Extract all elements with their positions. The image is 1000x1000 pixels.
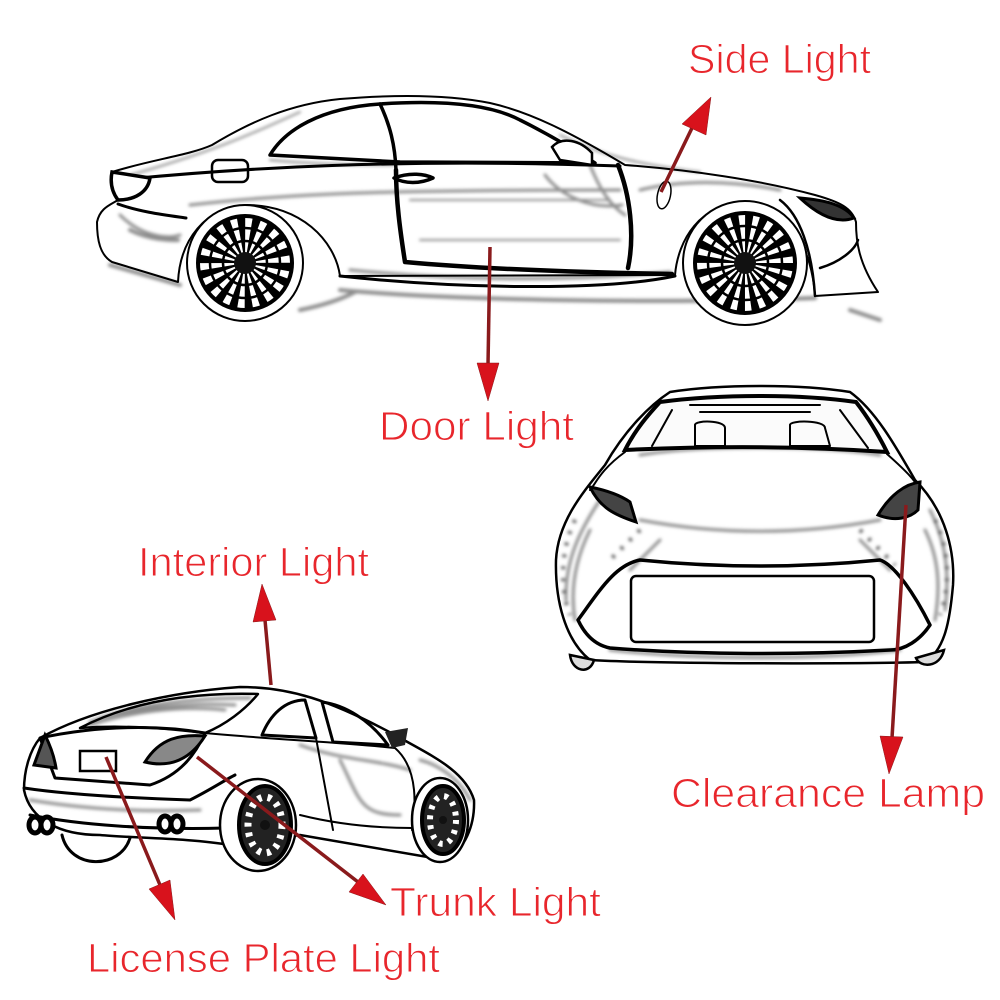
door lines bbox=[205, 733, 415, 830]
license plate bbox=[80, 751, 116, 771]
right tail light bbox=[878, 482, 920, 519]
left tail light bbox=[590, 487, 636, 522]
mirror bbox=[385, 728, 408, 748]
mirror bbox=[552, 141, 592, 165]
left rear tire bbox=[62, 835, 130, 862]
soft body shading bbox=[30, 698, 470, 815]
side view car illustration bbox=[97, 96, 880, 325]
label: license plate light: License Plate Light bbox=[87, 935, 441, 981]
license plate area bbox=[631, 576, 874, 642]
arrow: trunk light bbox=[197, 757, 386, 905]
label: interior light: Interior Light bbox=[138, 539, 370, 585]
lower bumper frame bbox=[578, 560, 930, 654]
body outline bbox=[556, 386, 953, 663]
bottom tires bbox=[570, 650, 944, 670]
arrow: clearance lamp bbox=[880, 505, 906, 774]
lower bumper bbox=[24, 775, 235, 828]
headlight bbox=[800, 198, 854, 220]
label: trunk light: Trunk Light bbox=[390, 879, 602, 925]
front wheel bbox=[412, 778, 468, 862]
front bumper bbox=[780, 200, 858, 296]
label: door light: Door Light bbox=[379, 403, 575, 449]
rear wheel bbox=[220, 779, 296, 871]
arrow: door light bbox=[477, 247, 499, 401]
rear window bbox=[80, 694, 258, 733]
front wheel bbox=[683, 201, 807, 325]
tail light bbox=[111, 172, 150, 200]
rear window bbox=[625, 396, 887, 452]
sill bbox=[340, 276, 675, 287]
window interior bbox=[652, 405, 868, 448]
three-quarter rear view car illustration bbox=[24, 687, 474, 871]
rear view car illustration bbox=[556, 386, 953, 670]
fuel door bbox=[212, 160, 248, 182]
soft body shading bbox=[563, 448, 947, 658]
door handle bbox=[394, 174, 433, 182]
side windows bbox=[262, 700, 388, 745]
trunk bbox=[40, 728, 205, 785]
arrow: interior light bbox=[253, 584, 276, 685]
body outline bbox=[24, 687, 474, 860]
arrow: side light bbox=[661, 97, 711, 192]
side light marker bbox=[655, 180, 673, 210]
left tail lamp bbox=[34, 735, 56, 768]
label: clearance lamp: Clearance Lamp bbox=[671, 770, 985, 816]
car body outline bbox=[97, 96, 878, 296]
soft body shading bbox=[110, 112, 880, 320]
label: side light: Side Light bbox=[688, 36, 872, 82]
door lines bbox=[396, 165, 672, 274]
exhaust pipes bbox=[29, 816, 183, 833]
rear bumper line bbox=[118, 204, 186, 218]
arrow: license plate light bbox=[106, 757, 175, 920]
roof and window frame bbox=[270, 103, 595, 163]
trunk lid lines bbox=[590, 452, 920, 490]
right tail lamp bbox=[145, 736, 205, 764]
rear wheel bbox=[187, 205, 303, 321]
